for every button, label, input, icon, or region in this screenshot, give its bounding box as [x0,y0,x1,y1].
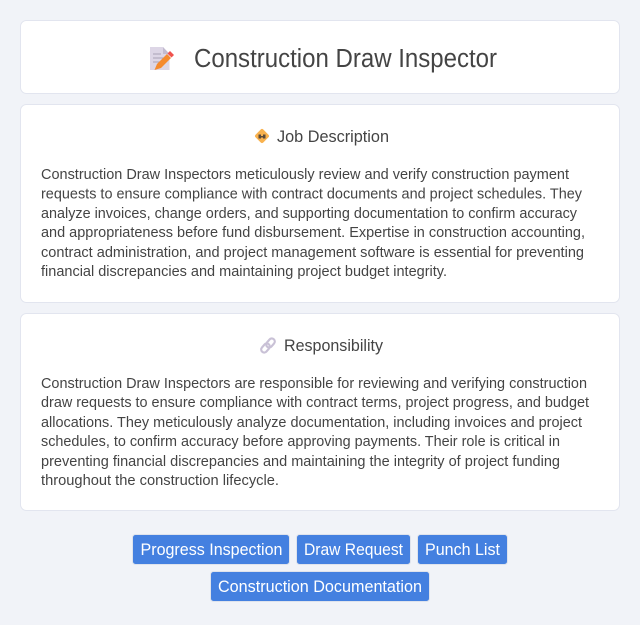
text block: responsibility [41,375,590,489]
text block: responsibility: throughout the construction lifecycle. [41,472,279,489]
tag: punch list [418,534,508,564]
panel: title card [20,20,620,94]
text block: responsibility: draw requests to ensure compliance with contract terms, project progress, and budget [41,394,590,411]
text block: job description [41,166,585,280]
tag: progress inspection: Progress Inspection [140,540,282,559]
panel: job description [20,104,620,302]
icon: orange diamond sign [254,128,270,144]
icon: document with pencil [150,47,174,70]
tag: draw request: Draw Request [304,540,403,559]
tag: progress inspection [132,534,290,564]
text block: job description: Construction Draw Inspectors meticulously review and verify construction payment [41,166,570,183]
title: Construction Draw Inspector [194,45,497,73]
text block: responsibility: preventing financial discrepancies and maintaining the integrity of project funding [41,453,560,470]
panel: responsibility [20,314,620,510]
text block: job description: requests to ensure compliance with contract documents and project schedules. They [41,186,582,202]
text block: job description: and appropriateness before fund disbursement. Expertise in construction accounting, [41,224,585,241]
tag: draw request [296,534,410,564]
text block: responsibility: allocations. They meticulously analyze documentation, including invoices and project [41,414,583,431]
tag: construction documentation [210,572,430,602]
heading: responsibility: Responsibility [284,336,383,355]
text block: job description: analyze invoices, change orders, and supporting documentation to confirm accuracy [41,205,577,222]
heading: job description: Job Description [277,127,389,146]
text block: responsibility: schedules, to confirm accuracy before approving payments. Their role is critical in [41,433,560,450]
icon: chain link [260,337,276,354]
text block: job description: financial discrepancies and maintaining project budget integrity. [41,263,447,280]
text block: responsibility: Construction Draw Inspectors are responsible for reviewing and verifying construction [41,375,587,392]
text block: job description: contract administration, and project management software is essential for preventing [41,244,584,261]
tag: construction documentation: Construction Documentation [218,577,422,596]
tag: punch list: Punch List [425,540,500,559]
